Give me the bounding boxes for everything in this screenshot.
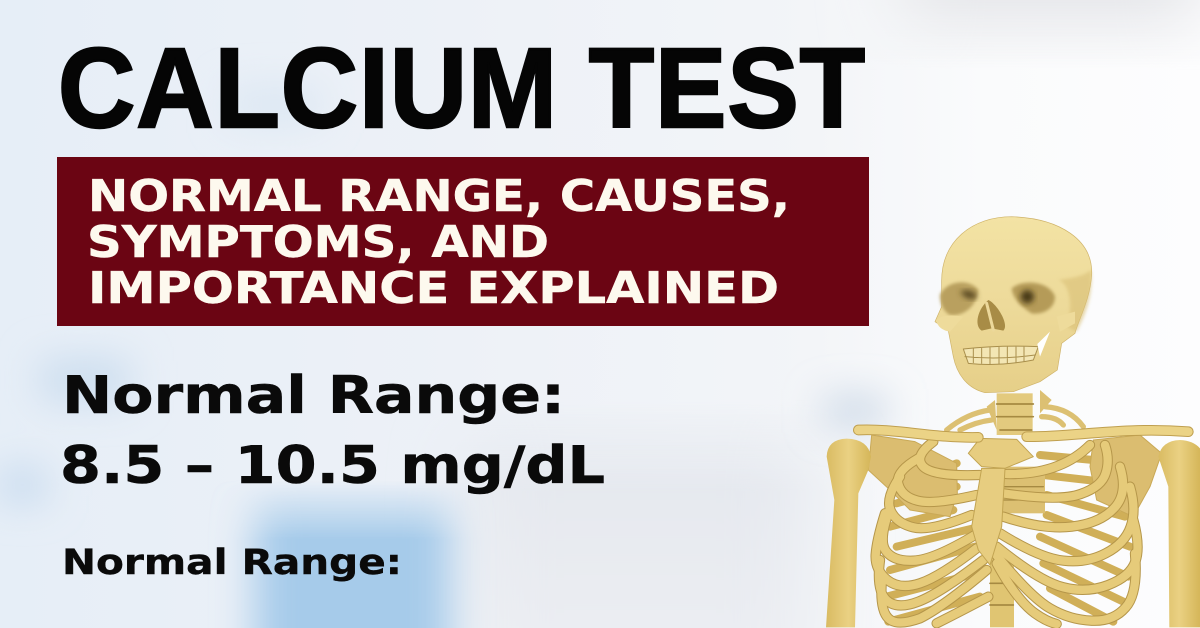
neck ribs [947,407,1083,430]
normal range value: 8.5 – 10.5 mg/dL [60,436,605,496]
ribs: outline layer [876,442,1138,624]
banner: subtitle [57,157,869,326]
teeth [963,346,1038,364]
eye socket left [940,282,978,315]
jaw gap [1037,332,1050,357]
skeleton illustration [826,217,1200,627]
spine [987,390,1052,627]
humeri [826,439,1200,627]
temple shading [1058,270,1092,332]
secondary normal range label: Normal Range: [62,543,402,583]
title: CALCIUM TEST [58,25,866,151]
skull [935,217,1092,393]
shoulder blades [868,435,1162,517]
nose [977,300,1005,331]
subtitle text: SYMPTOMS, AND [87,217,549,268]
subtitle text: NORMAL RANGE, CAUSES, [88,171,790,222]
normal range value [60,366,605,496]
cranium and jaw [935,217,1092,393]
eye socket right [1012,283,1055,314]
sternum [968,438,1033,565]
normal range value: Normal Range: [62,366,565,426]
cheek bones [936,312,1075,332]
subtitle text: IMPORTANCE EXPLAINED [88,263,779,314]
subtitle text [87,171,790,314]
pupil shadow right [1021,290,1034,303]
clavicles [858,430,1188,437]
pupil shadow left [960,290,977,299]
ribs: bone layer [876,442,1138,624]
back ribs [887,455,1130,622]
